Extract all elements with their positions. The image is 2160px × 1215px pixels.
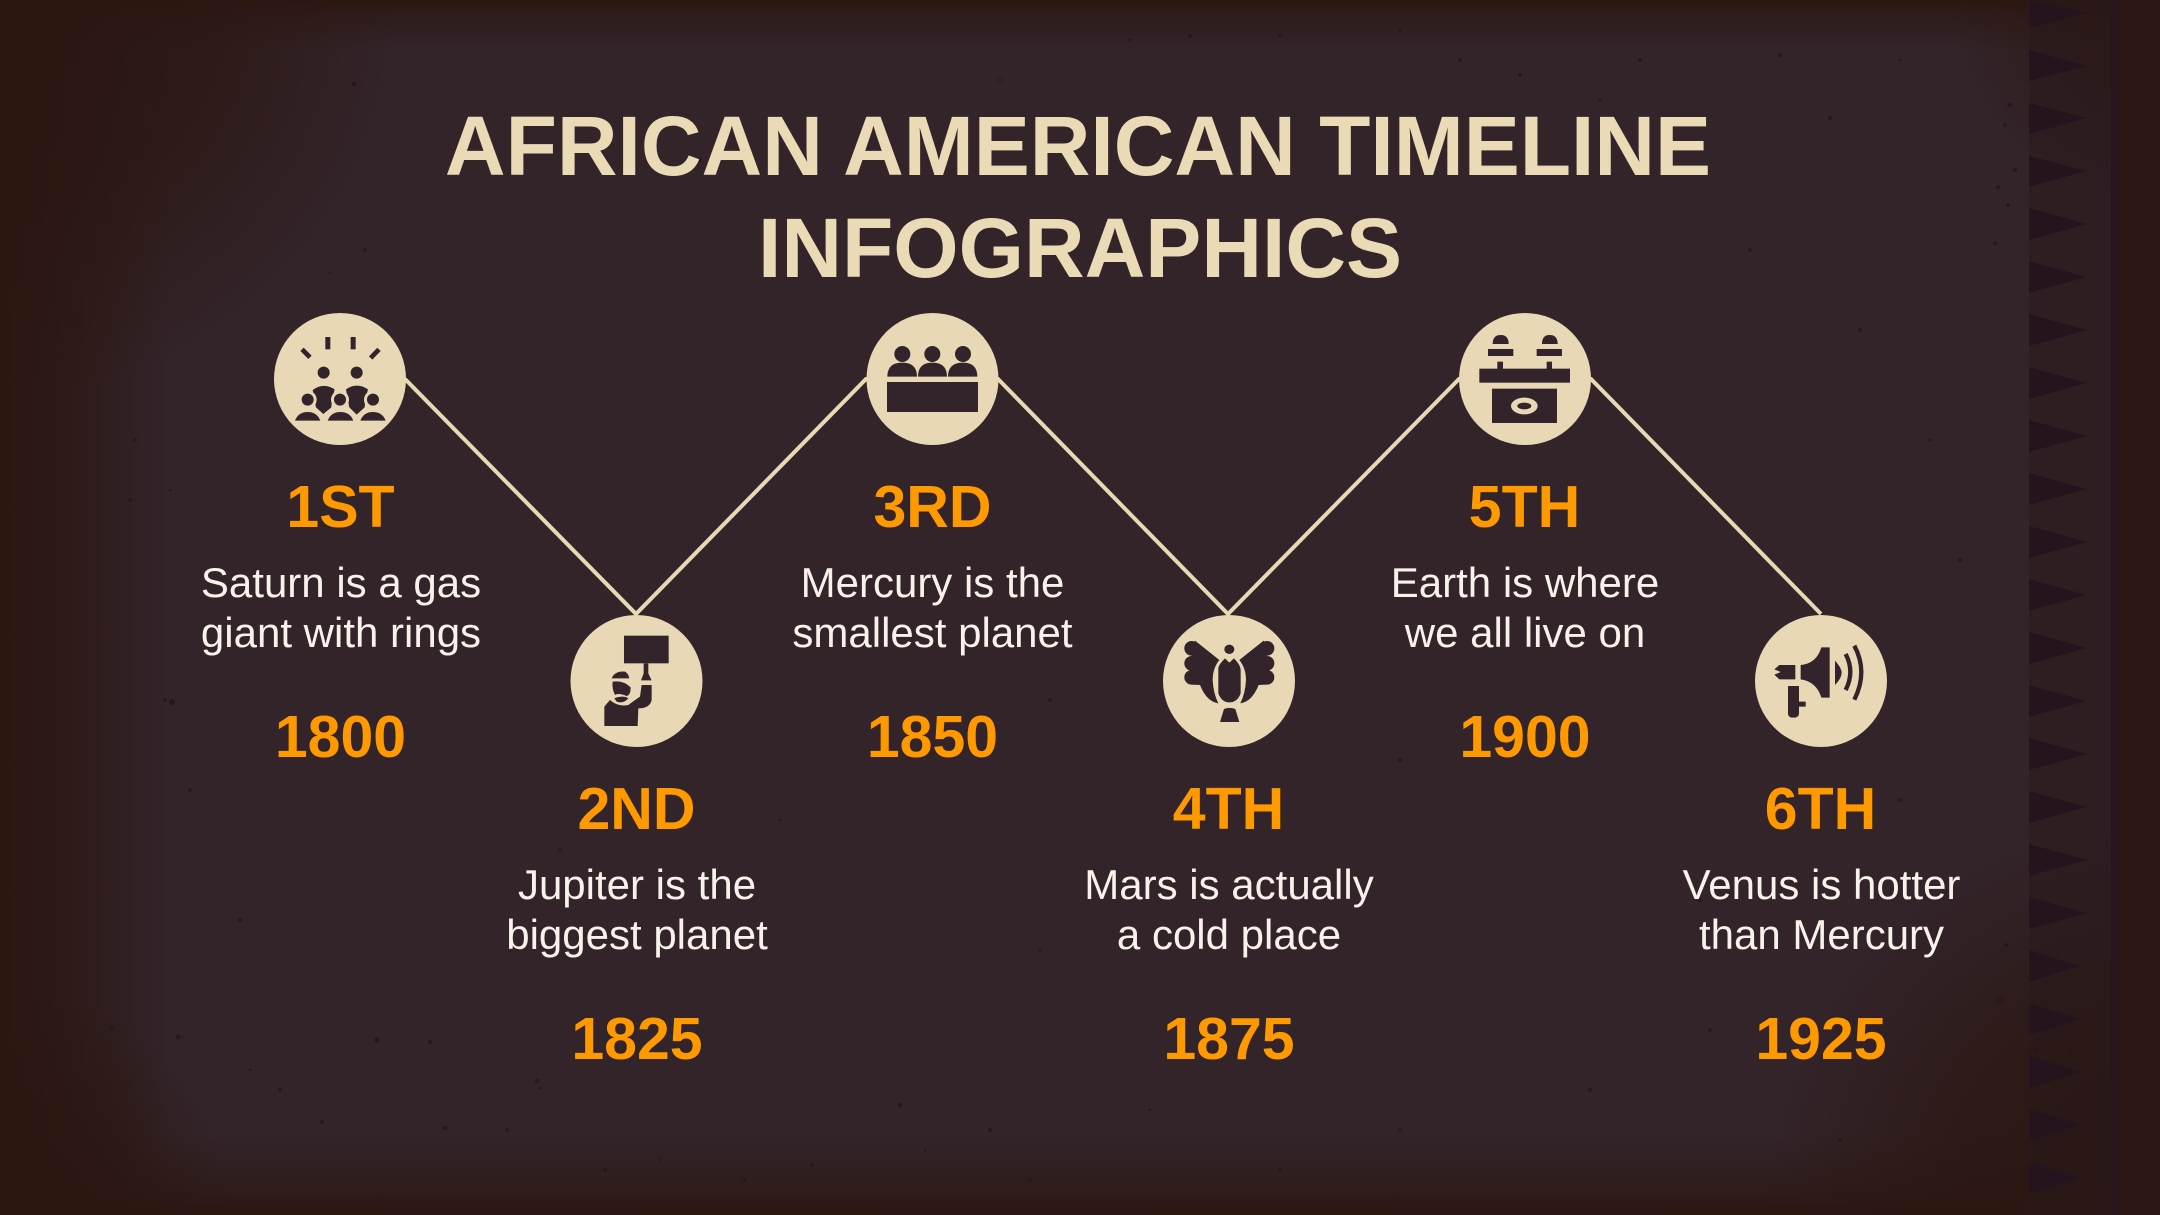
milestone 2 xyxy=(506,615,768,1072)
decorative right border pattern xyxy=(2029,0,2160,1215)
title xyxy=(445,99,1711,295)
title: AFRICAN AMERICAN TIMELINE xyxy=(445,99,1711,193)
year: 1925 xyxy=(1755,1006,1887,1072)
milestone 4 xyxy=(1084,615,1374,1072)
milestone 3 xyxy=(792,313,1073,770)
description: biggest planet xyxy=(506,911,768,958)
icon: protester with sign xyxy=(570,615,702,747)
rank: 6TH xyxy=(1765,776,1876,842)
year: 1825 xyxy=(571,1006,703,1072)
rank: 1ST xyxy=(286,474,395,540)
description: Jupiter is the xyxy=(518,861,756,908)
description: than Mercury xyxy=(1699,911,1944,958)
zigzag timeline connector xyxy=(405,379,1821,614)
description: Mercury is the xyxy=(801,559,1064,606)
description: smallest planet xyxy=(792,609,1073,656)
description: Saturn is a gas xyxy=(201,559,481,606)
rank: 4TH xyxy=(1173,776,1284,842)
milestone 1 xyxy=(201,313,481,770)
icon: panel of three people xyxy=(866,313,998,445)
title: INFOGRAPHICS xyxy=(758,201,1402,295)
year: 1875 xyxy=(1163,1006,1295,1072)
year: 1900 xyxy=(1459,704,1591,770)
year: 1800 xyxy=(275,704,406,770)
icon: podium xyxy=(1459,313,1591,445)
icon: megaphone xyxy=(1755,615,1887,747)
description: Mars is actually xyxy=(1084,861,1374,908)
description: Venus is hotter xyxy=(1683,861,1960,908)
rank: 5TH xyxy=(1469,474,1580,540)
description: Earth is where xyxy=(1391,559,1659,606)
description: giant with rings xyxy=(201,609,481,656)
icon: crowd xyxy=(274,313,406,445)
icon: eagle xyxy=(1163,615,1295,747)
rank: 3RD xyxy=(873,474,992,540)
year: 1850 xyxy=(867,704,998,770)
description: a cold place xyxy=(1117,911,1341,958)
milestone 6 xyxy=(1683,615,1960,1072)
rank: 2ND xyxy=(577,776,696,842)
description: we all live on xyxy=(1404,609,1645,656)
milestone 5 xyxy=(1391,313,1659,770)
